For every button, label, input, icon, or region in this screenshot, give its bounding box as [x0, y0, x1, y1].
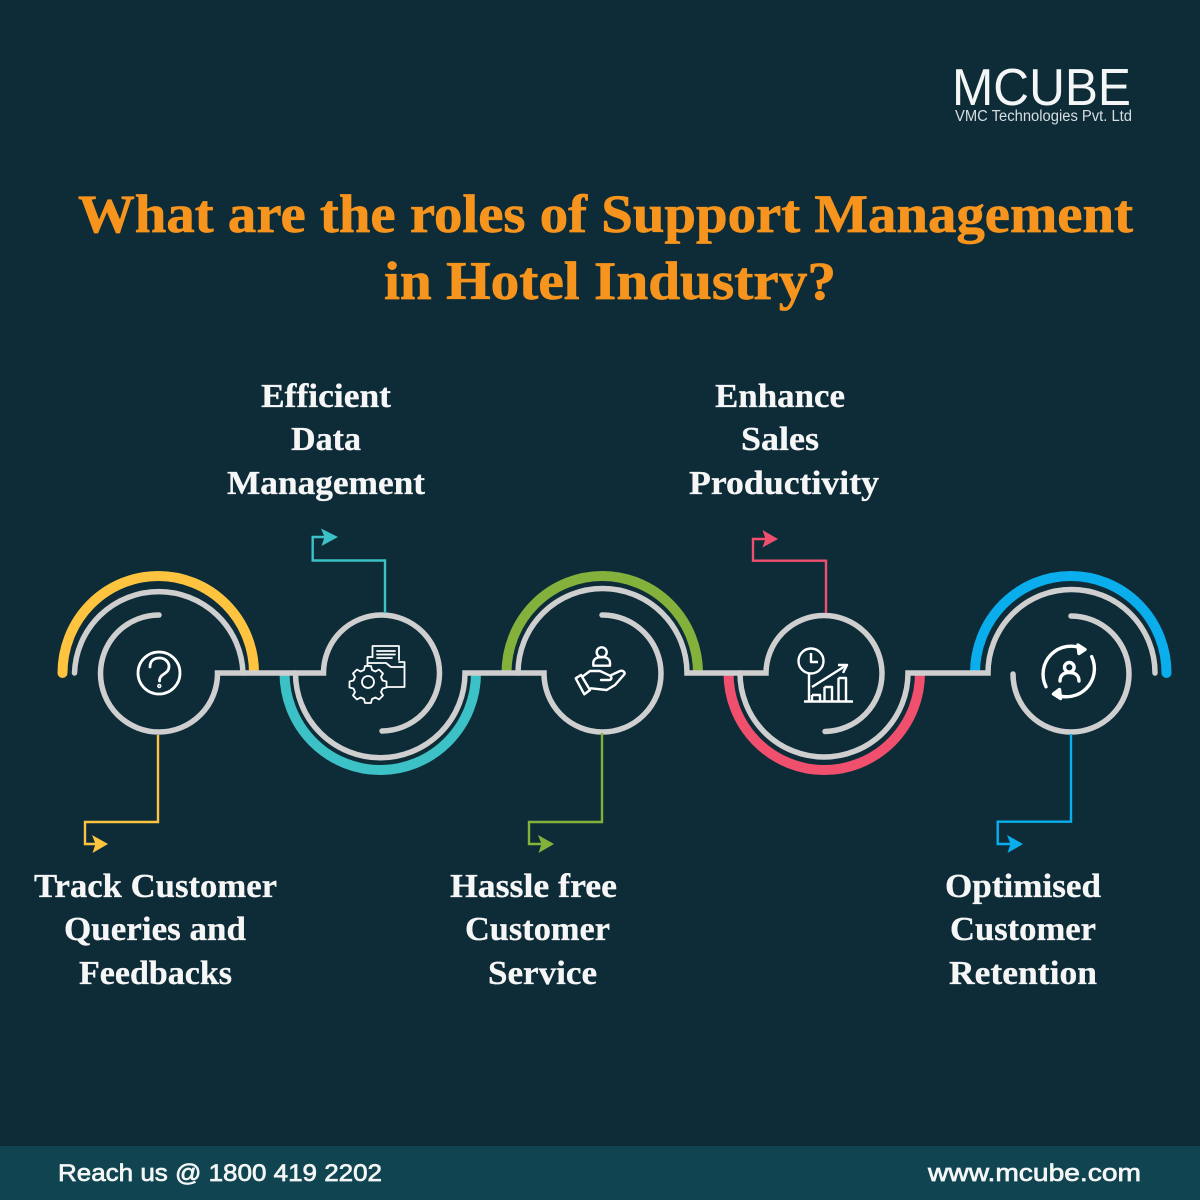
- label: Efficient Data Management: Management: [227, 465, 426, 502]
- label: Hassle free Customer Service: Hassle free: [450, 868, 617, 905]
- grey track: middle arc 1: [74, 592, 243, 673]
- grey track: inner circle 1, line, inner circle 2: [101, 615, 440, 732]
- title: in Hotel Industry?: [384, 251, 836, 311]
- arc: blue: [975, 576, 1172, 678]
- connector: blue arrow: [998, 734, 1071, 853]
- label: Optimised Customer Retention: Optimised: [945, 868, 1101, 905]
- icon: clock and growth chart: [798, 648, 853, 702]
- title: [78, 184, 1133, 311]
- connector: pink arrow: [753, 530, 826, 613]
- footer: website: www.mcube.com: [927, 1160, 1141, 1187]
- connector: yellow arrow: [85, 735, 158, 853]
- icon: folder and gear: [350, 646, 404, 703]
- label: Efficient Data Management: [227, 378, 426, 502]
- label: Optimised Customer Retention: Customer: [950, 911, 1096, 948]
- footer: phone: Reach us @ 1800 419 2202: [58, 1160, 382, 1187]
- label: Track Customer Queries and Feedbacks: Feedbacks: [79, 955, 232, 992]
- icon: hand holding person: [576, 647, 625, 694]
- label: Enhance Sales Productivity: Productivity: [689, 465, 879, 502]
- arc: pink: [728, 673, 920, 770]
- arc: teal: [284, 673, 476, 770]
- grey track: middle arc 4, line, middle arc 5: [740, 590, 1155, 757]
- label: Hassle free Customer Service: [450, 868, 617, 992]
- label: Enhance Sales Productivity: [689, 378, 879, 502]
- label: Track Customer Queries and Feedbacks: Queries and: [64, 911, 246, 948]
- icon: customer retention cycle: [1043, 645, 1094, 698]
- label: Enhance Sales Productivity: Sales: [741, 421, 819, 458]
- grey track: middle arc 2, line, inner circle 3: [296, 615, 661, 758]
- label: Optimised Customer Retention: [945, 868, 1101, 992]
- label: Enhance Sales Productivity: Enhance: [715, 378, 845, 415]
- footer bar: [0, 1146, 1200, 1200]
- logo: MCUBE: VMC Technologies Pvt. Ltd: [955, 108, 1132, 125]
- grey track: inner circle 5: [1013, 616, 1129, 732]
- grey track: middle arc 3, line, inner circle 4: [518, 588, 882, 732]
- label: Efficient Data Management: Efficient: [261, 378, 392, 415]
- arc: yellow: [58, 576, 254, 678]
- icon: question mark: [138, 652, 180, 694]
- logo: MCUBE: MCUBE: [952, 59, 1131, 117]
- connector: green arrow: [529, 733, 602, 853]
- label: Optimised Customer Retention: Retention: [949, 955, 1097, 992]
- label: Efficient Data Management: Data: [291, 421, 361, 458]
- arc: green: [506, 576, 698, 673]
- label: Track Customer Queries and Feedbacks: Track Customer: [34, 868, 277, 905]
- title: What are the roles of Support Management: [78, 184, 1133, 244]
- label: Hassle free Customer Service: Customer: [465, 911, 610, 948]
- label: Track Customer Queries and Feedbacks: [34, 868, 277, 992]
- connector: teal arrow: [313, 528, 385, 613]
- label: Hassle free Customer Service: Service: [488, 955, 597, 992]
